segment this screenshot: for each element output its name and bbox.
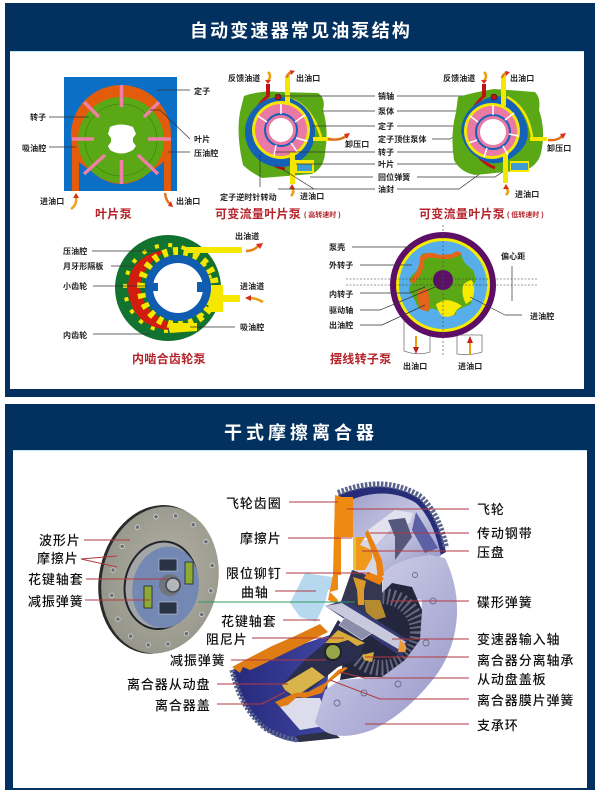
labels: vane pump: 转子 — [30, 112, 46, 122]
diagram: gerotor pump — [346, 225, 538, 356]
labels: gerotor pump: 驱动轴 — [329, 305, 353, 315]
arrow: high speed feedback — [265, 72, 271, 84]
labels: vane pump: 进油口 — [40, 196, 64, 206]
labels: clutch right: 变速器输入轴 — [477, 632, 560, 647]
diagram: variable vane pump low speed — [452, 75, 547, 183]
labels: clutch left: 阻尼片 — [206, 632, 248, 647]
labels: low speed pump: 反馈油道 — [443, 73, 475, 83]
labels: gerotor pump: 进油腔 — [530, 311, 554, 321]
labels: gear pump: 内啮合齿轮泵 — [132, 351, 206, 366]
labels: clutch right: 从动盘盖板 — [477, 672, 547, 687]
labels: high speed pump: 进油口 — [300, 191, 324, 201]
labels: center callouts — [260, 91, 510, 194]
arrow: low speed outlet — [502, 71, 510, 78]
labels: high speed pump: 卸压口 — [345, 139, 369, 149]
labels: low speed pump: 可变流量叶片泵 — [419, 206, 505, 221]
labels: gerotor pump: 进油口 — [458, 361, 482, 371]
labels: high speed pump — [215, 73, 369, 221]
labels: clutch left — [127, 496, 370, 713]
labels: vane pump — [22, 86, 218, 221]
labels: center callouts: 叶片 — [378, 159, 394, 169]
labels: gear pump: 月牙形隔板 — [63, 261, 104, 271]
labels: vane pump: 定子 — [194, 86, 210, 96]
labels: center callouts: 定子顶住泵体 — [378, 134, 427, 144]
labels: center callouts: 回位弹簧 — [378, 172, 410, 182]
labels: clutch left: 曲轴 — [241, 585, 269, 600]
labels: gear pump: 压油腔 — [63, 246, 87, 256]
labels: gerotor pump: 内转子 — [329, 289, 353, 299]
labels: high speed pump: 定子逆时针转动 — [220, 192, 277, 202]
labels: high speed pump: 反馈油道 — [228, 73, 260, 83]
heading: clutch: 干式摩擦离合器 — [224, 422, 378, 443]
labels: high speed pump: 可变流量叶片泵 — [215, 206, 301, 221]
labels: gear pump: 出油道 — [235, 231, 259, 241]
labels: vane pump: 吸油腔 — [22, 143, 46, 153]
labels: vane pump: 叶片 — [194, 134, 210, 144]
labels: gear pump: 小齿轮 — [63, 281, 87, 291]
labels: low speed pump: 出油口 — [510, 73, 534, 83]
labels: center callouts: 定子 — [378, 121, 394, 131]
labels: clutch disc: 摩擦片 — [37, 551, 79, 566]
arrow: low speed feedback — [481, 72, 487, 84]
labels: gear pump: 内齿轮 — [63, 330, 87, 340]
arrow: high speed outlet — [287, 70, 295, 78]
labels: gerotor pump: 泵壳 — [329, 242, 345, 252]
labels: low speed pump: 进油口 — [515, 189, 539, 199]
diagram: clutch disc — [85, 494, 232, 665]
labels: gerotor pump: 偏心距 — [501, 251, 525, 261]
labels: gear pump: 吸油腔 — [240, 322, 264, 332]
labels: clutch disc — [28, 533, 168, 609]
labels: clutch left: 减振弹簧 — [170, 653, 226, 668]
labels: clutch right: 飞轮 — [477, 502, 505, 517]
labels: low speed pump — [419, 73, 571, 221]
labels: clutch right: 压盘 — [477, 545, 505, 560]
arrow: gear outlet — [246, 243, 263, 251]
diagram: clutch cutaway — [232, 484, 457, 742]
labels: clutch left: 摩擦片 — [240, 531, 282, 546]
labels: clutch left: 离合器盖 — [155, 698, 211, 713]
labels: clutch disc: 波形片 — [39, 533, 81, 548]
arrow: vane outlet — [165, 193, 173, 207]
arrow: low speed inlet — [503, 184, 509, 195]
panel: oil pump structures — [5, 3, 595, 397]
labels: center callouts: 转子 — [378, 147, 394, 157]
arrow: high speed inlet — [289, 184, 295, 196]
labels: clutch disc: 减振弹簧 — [28, 594, 84, 609]
panel: dry friction clutch — [5, 404, 595, 790]
diagram: variable vane pump high speed — [239, 75, 330, 184]
labels: gerotor pump: 摆线转子泵 — [330, 351, 392, 366]
labels: center callouts: 油封 — [378, 184, 394, 194]
labels: high speed pump: ( 高转速时 ) — [304, 210, 341, 219]
labels: gear pump — [63, 231, 264, 366]
arrow: vane inlet — [71, 193, 79, 209]
labels: clutch right: 传动钢带 — [477, 526, 533, 541]
labels: vane pump: 压油腔 — [194, 148, 218, 158]
labels: gerotor pump: 出油腔 — [329, 320, 353, 330]
labels: center callouts: 销轴 — [378, 91, 394, 101]
labels: gerotor pump: 外转子 — [329, 260, 353, 270]
line: green reference — [198, 601, 355, 603]
labels: clutch right: 碟形弹簧 — [477, 595, 533, 610]
labels: low speed pump: 卸压口 — [547, 143, 571, 153]
arrow: high speed relief — [328, 133, 350, 140]
labels: clutch right: 离合器分离轴承 — [477, 653, 574, 668]
labels: vane pump: 叶片泵 — [95, 206, 132, 221]
labels: center callouts: 泵体 — [378, 106, 394, 116]
labels: gerotor pump: 出油口 — [403, 361, 427, 371]
labels: high speed pump: 出油口 — [296, 73, 320, 83]
labels: clutch left: 离合器从动盘 — [127, 677, 210, 692]
labels: clutch left: 飞轮齿圈 — [226, 496, 282, 511]
labels: clutch disc: 花键轴套 — [28, 572, 84, 587]
labels: clutch left: 花键轴套 — [221, 614, 277, 629]
labels: low speed pump: ( 低转速时 ) — [507, 210, 544, 219]
labels: gerotor pump — [329, 242, 554, 371]
labels: vane pump: 出油口 — [176, 196, 200, 206]
labels: gear pump: 进油道 — [240, 281, 264, 291]
labels: clutch left: 限位铆钉 — [226, 566, 282, 581]
labels: clutch right: 支承环 — [477, 718, 519, 733]
diagram: internal gear pump — [115, 235, 242, 341]
labels: clutch right — [330, 502, 574, 733]
arrow: gear inlet — [245, 295, 263, 302]
heading: oil pumps: 自动变速器常见油泵结构 — [190, 20, 412, 41]
labels: clutch right: 离合器膜片弹簧 — [477, 693, 574, 708]
arrow: low speed relief — [548, 133, 566, 140]
diagram: vane pump — [64, 77, 177, 191]
